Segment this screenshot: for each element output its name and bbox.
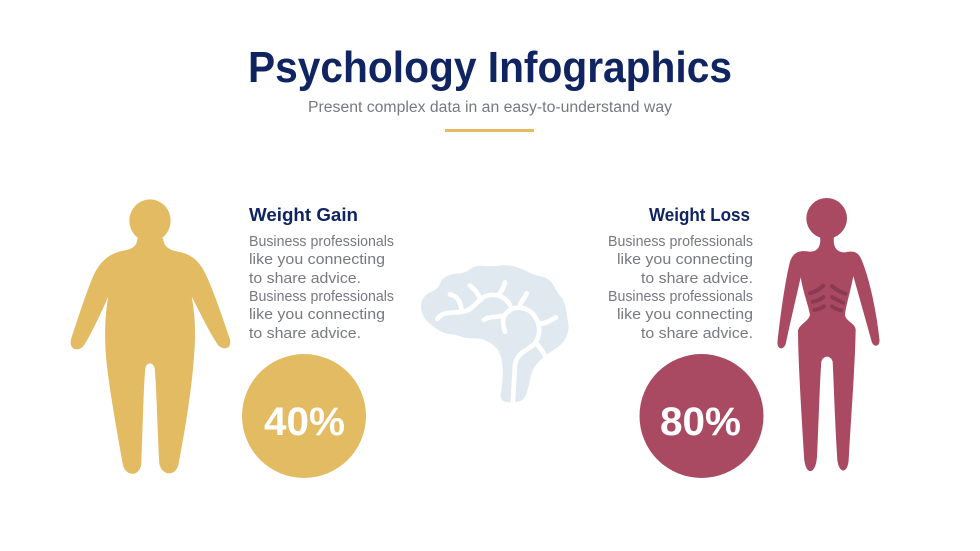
text block: weight gain description: Business professionals <box>249 289 394 305</box>
icon: overweight figure <box>71 199 230 474</box>
text block: weight loss description: to share advice. <box>641 271 753 287</box>
text block: weight loss description: Business professionals <box>608 234 753 250</box>
text block: weight gain description: like you connecting <box>249 252 385 268</box>
text block: weight loss description: Business professionals <box>608 289 753 305</box>
heading: weight gain: Weight Gain <box>249 204 358 225</box>
callout: 80 percent <box>640 354 764 478</box>
text block: weight gain description: Business professionals <box>249 234 394 250</box>
text block: weight gain description: to share advice. <box>249 271 361 287</box>
panel: weight gain text <box>249 204 394 342</box>
subtitle: Present complex data in an easy-to-understand way <box>308 99 672 116</box>
text block: weight loss description: to share advice. <box>641 326 753 342</box>
icon: underweight figure <box>777 198 880 471</box>
text block: weight gain description <box>249 234 394 342</box>
accent divider <box>445 129 534 132</box>
icon: brain <box>421 265 569 405</box>
text block: weight loss description: like you connecting <box>617 252 753 268</box>
text block: weight loss description: like you connecting <box>617 307 753 323</box>
title: Psychology Infographics <box>248 43 732 92</box>
text block: weight loss description <box>608 234 753 342</box>
text block: weight gain description: to share advice. <box>249 326 361 342</box>
callout: 80 percent: 80% <box>660 400 741 444</box>
callout: 40 percent: 40% <box>264 400 345 444</box>
text block: weight gain description: like you connecting <box>249 307 385 323</box>
callout: 40 percent <box>242 354 366 478</box>
panel: weight loss text <box>608 204 753 342</box>
heading: weight loss: Weight Loss <box>649 204 750 225</box>
